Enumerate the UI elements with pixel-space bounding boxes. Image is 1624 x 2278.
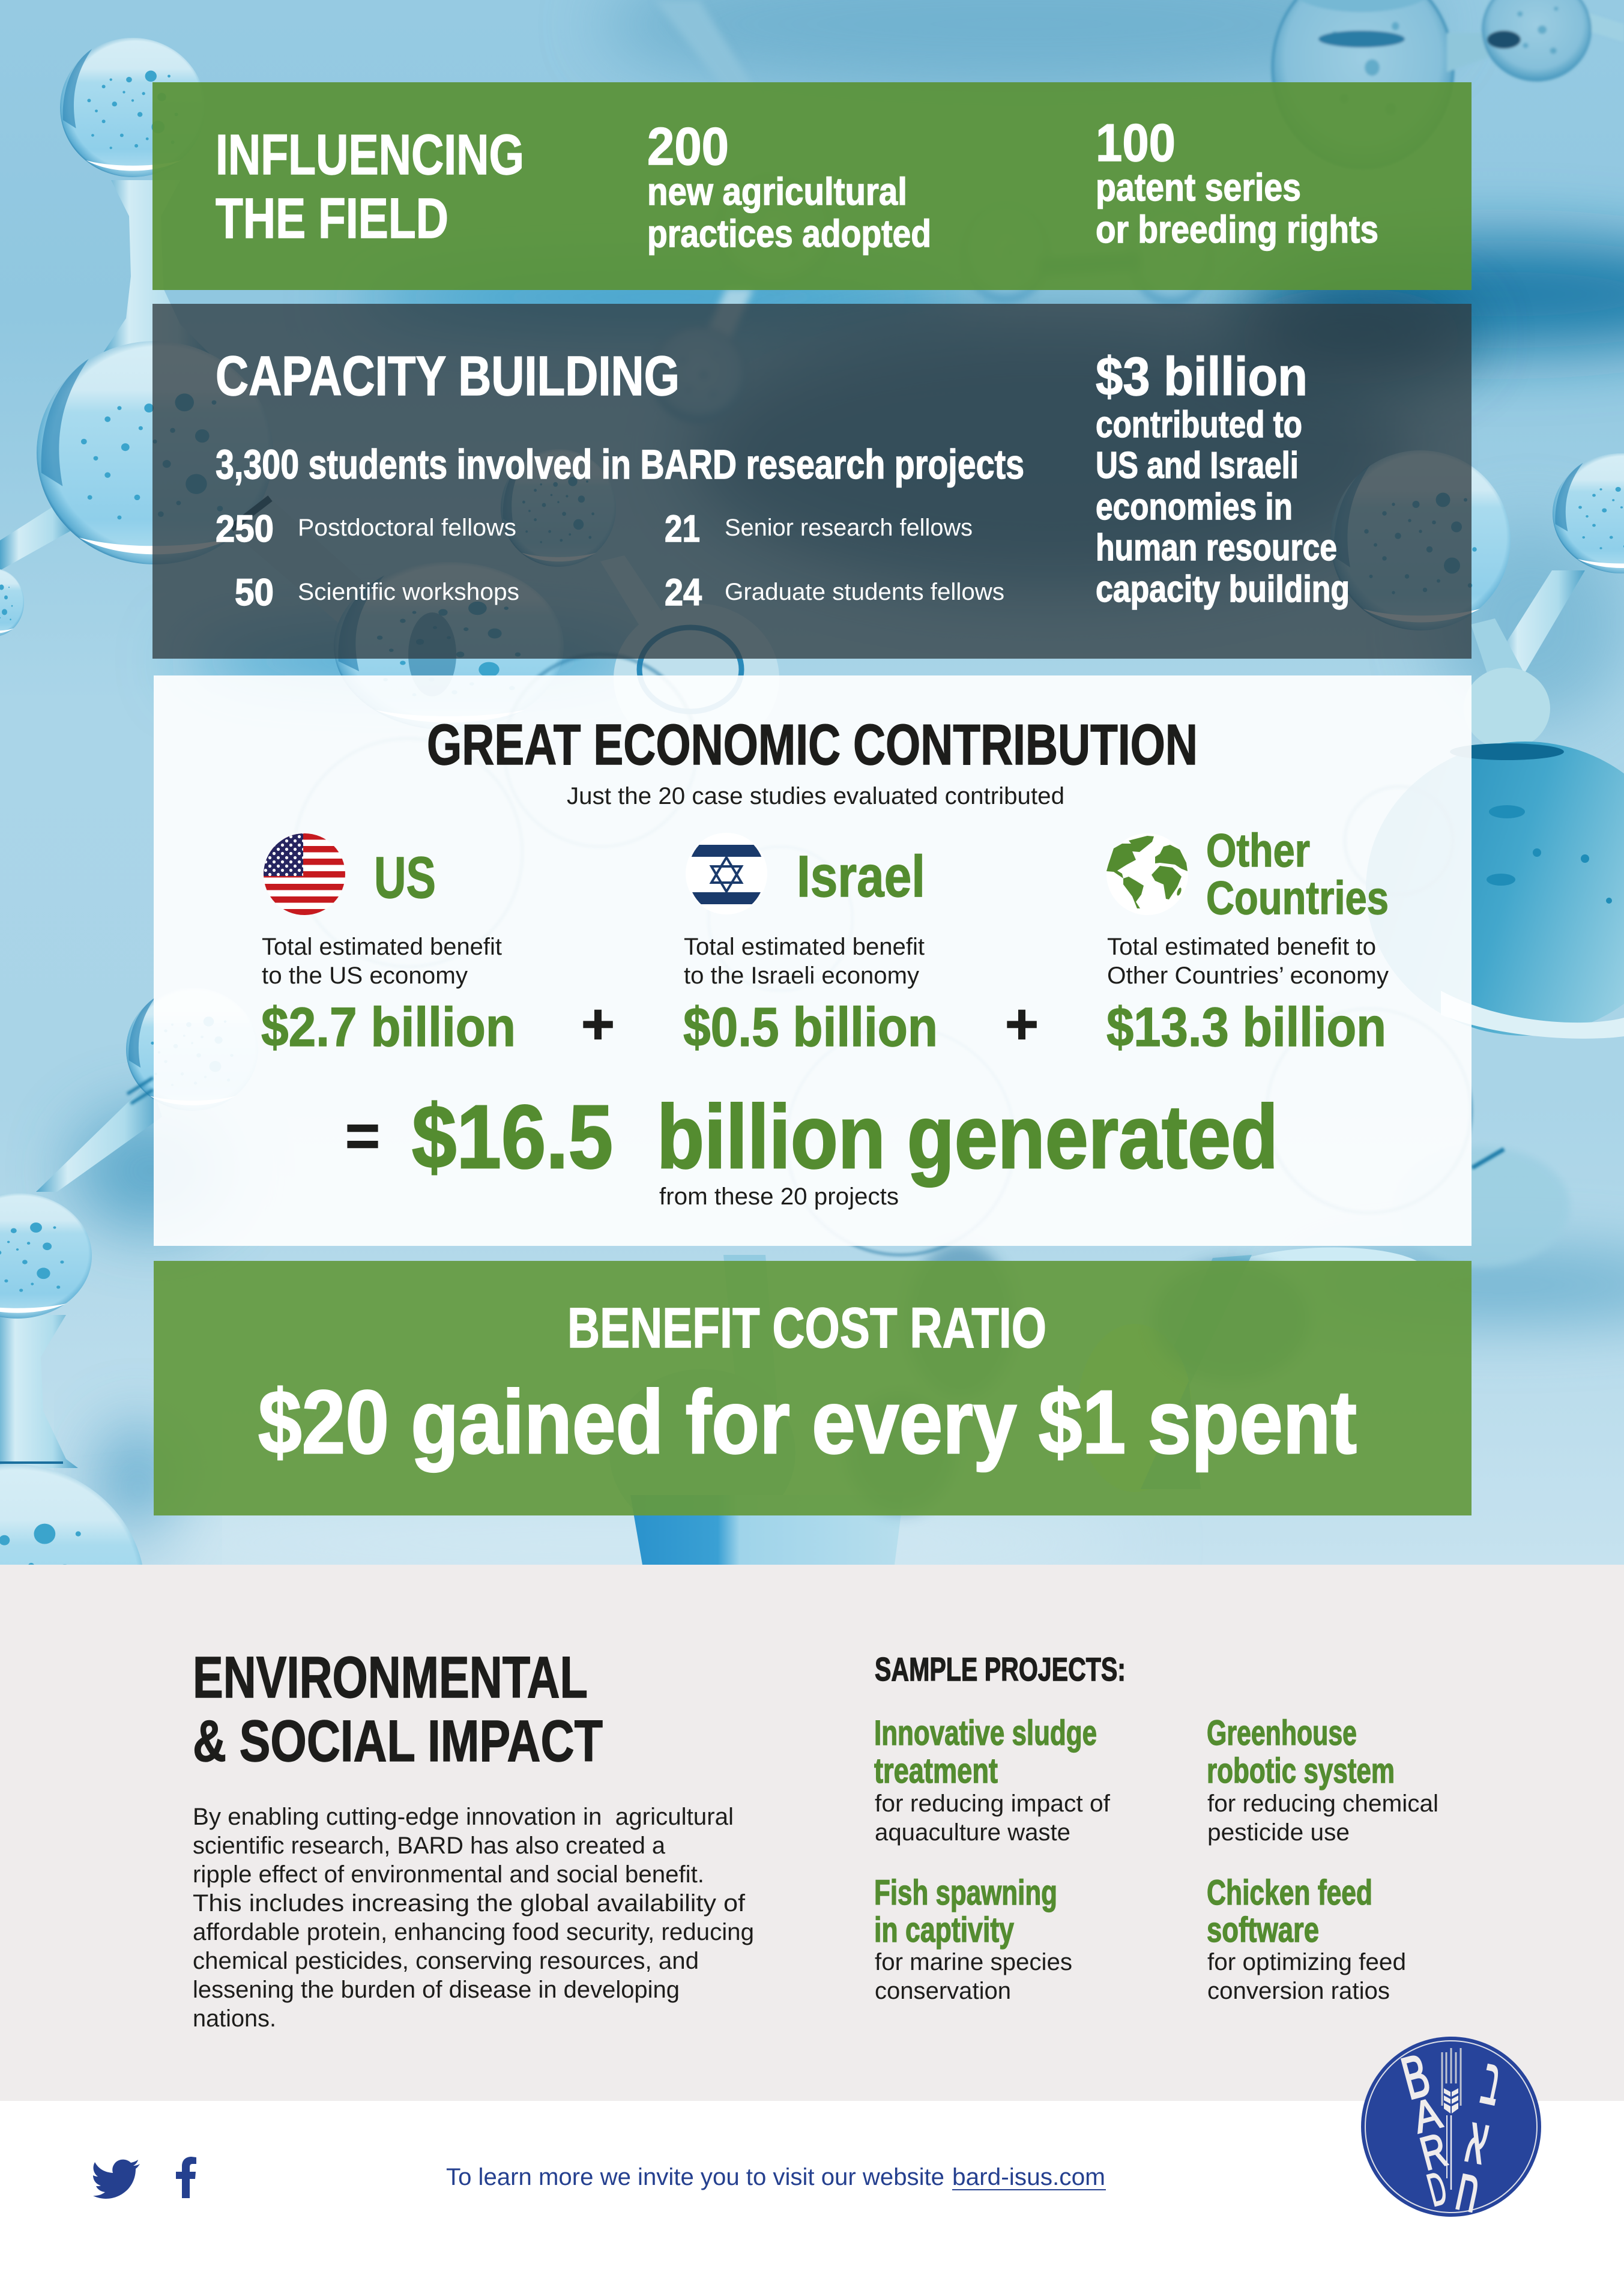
total: $16.5 billion generated: $16.5 [412,1086,613,1187]
text: website call to action: bard-isus.com [952,2164,1105,2190]
panel: capacity building [152,304,1472,659]
text: US benefit: $2.7 billion [261,997,516,1058]
icon: facebook f [176,2157,196,2198]
ghost spheres behind white panel [294,654,1471,1255]
heading: influencing the field: THE FIELD [216,187,448,250]
heading: influencing the field: INFLUENCING [216,123,524,187]
project: chicken feed software: for optimizing feed [1207,1949,1406,1975]
text block: impact description: scientific research, BARD has also created a [193,1832,666,1859]
stat: $3 billion contributed: economies in [1096,486,1293,528]
project: chicken feed software: Chicken feed [1207,1873,1372,1912]
project: chicken feed software [1207,1873,1406,2004]
project: greenhouse robotic system: robotic system [1207,1751,1395,1790]
text: other countries benefit: Other Countries’ economy [1107,962,1389,989]
heading: other countries: Other [1206,824,1310,877]
project: innovative sludge treatment: for reducing impact of [875,1790,1111,1817]
stat: senior research fellows: 21 [665,508,700,550]
text: Israel benefit: Total estimated benefit [684,934,925,960]
text block: impact description: affordable protein, enhancing food security, reducing [193,1919,754,1945]
symbol: plus: + [1005,992,1039,1056]
project: greenhouse robotic system [1207,1714,1438,1846]
symbol: plus: + [581,992,615,1056]
stat: scientific workshops [235,572,519,614]
panel: influencing the field [152,82,1472,290]
left molecule upper [0,38,384,636]
logo letters: BARD: B [1395,2041,1436,2112]
top right molecules [1270,0,1623,83]
stat: 100 patent series: 100 [1096,113,1176,172]
project: innovative sludge treatment: Innovative sludge [874,1714,1097,1753]
icon: globe [1106,833,1188,915]
project: greenhouse robotic system: pesticide use [1207,1819,1350,1846]
heading: other countries: Countries [1206,871,1389,924]
stat: 100 patent series: or breeding rights [1096,208,1378,251]
logo letters: BARD [1395,2041,1452,2216]
text block: impact description [193,1804,754,2032]
project: fish spawning in captivity [874,1873,1072,2004]
text: Israel benefit [683,934,938,1058]
left molecule lower [0,988,258,1718]
right molecules [1237,450,1624,1267]
stat: graduate students fellows [665,572,1004,614]
statement: $20 gained for every $1 spent: $20 gained for every $1 spent [258,1371,1357,1472]
logo letters: BARD: A [1408,2088,1446,2142]
project: fish spawning in captivity: in captivity [874,1911,1014,1950]
stat: 200 new agricultural practices [647,116,931,255]
text: other countries benefit [1106,934,1389,1058]
heading: great economic contribution: GREAT ECONOMIC CONTRIBUTION [427,713,1198,777]
heading: other countries [1206,824,1389,924]
subheading: students involved: 3,300 students involved in BARD research projects [216,441,1024,488]
stat: $3 billion contributed: $3 billion [1096,347,1308,407]
background: blue molecule photograph [0,0,1624,1718]
logo wheat ear [1442,2048,1461,2190]
logo letters: Hebrew: ב [1475,2039,1509,2122]
heading: capacity building: CAPACITY BUILDING [216,345,680,407]
stat: scientific workshops: 50 [235,572,274,614]
text block: impact description: nations. [193,2005,276,2032]
project: chicken feed software: conversion ratios [1207,1978,1390,2004]
panel: footer [0,2101,1624,2278]
stat: 200 new agricultural practices: 200 [647,116,729,176]
stat: 100 patent series [1096,113,1378,251]
project: greenhouse robotic system: for reducing chemical [1207,1790,1438,1817]
project: greenhouse robotic system: Greenhouse [1207,1714,1357,1753]
stat: 200 new agricultural practices: practices adopted [647,212,931,255]
heading: environmental and social impact: ENVIRONMENTAL [193,1645,588,1710]
icon: twitter bird [93,2160,140,2199]
stat: graduate students fellows: Graduate students fellows [725,579,1004,605]
logo: BARD seal [1361,2037,1541,2228]
total: $16.5 billion generated [345,1086,1278,1210]
text: website call to action: To learn more we invite you to visit our website [446,2164,944,2190]
text: Israel benefit: to the Israeli economy [684,962,919,989]
panel: benefit cost ratio [154,1261,1472,1515]
logo letters: Hebrew [1450,2039,1509,2228]
logo letters: BARD: R [1415,2123,1452,2181]
text: other countries benefit: $13.3 billion [1106,997,1386,1058]
project: innovative sludge treatment: treatment [874,1751,998,1790]
stat: postdoctoral fellows: 250 [216,508,274,550]
logo letters: Hebrew: א [1458,2097,1497,2181]
icon: US flag [264,833,345,915]
centre molecules behind dark panel [335,450,779,722]
stat: scientific workshops: Scientific workshops [298,579,519,605]
stat: $3 billion contributed: capacity building [1096,569,1350,610]
stat: senior research fellows [665,508,973,550]
stat: $3 billion contributed: US and Israeli [1096,445,1299,486]
heading: environmental and social impact: & SOCIAL IMPACT [193,1708,603,1774]
stat: postdoctoral fellows: Postdoctoral fellows [298,515,516,541]
stat: postdoctoral fellows [216,508,516,550]
subheading: case studies: Just the 20 case studies evaluated contributed [567,783,1064,809]
text block: impact description: ripple effect of environmental and social benefit. [193,1861,704,1888]
project: chicken feed software: software [1207,1911,1319,1950]
logo letters: Hebrew: ח [1450,2151,1487,2228]
text block: impact description: chemical pesticides, conserving resources, and [193,1948,699,1974]
heading: US: US [374,845,436,910]
project: innovative sludge treatment: aquaculture waste [875,1819,1070,1846]
project: fish spawning in captivity: for marine species [875,1949,1072,1975]
stat: $3 billion contributed: human resource [1096,527,1337,569]
project: fish spawning in captivity: conservation [875,1978,1011,2004]
heading: benefit cost ratio: BENEFIT COST RATIO [567,1296,1046,1360]
project: innovative sludge treatment [874,1714,1111,1846]
text: Israel benefit: $0.5 billion [683,997,938,1058]
panel: great economic contribution [154,675,1472,1246]
lower centre molecule [609,1243,1309,1565]
logo letters: BARD: D [1422,2162,1452,2216]
top centre soft molecule [651,0,1212,422]
text block: impact description: lessening the burden of disease in developing [193,1977,680,2003]
heading: sample projects: SAMPLE PROJECTS: [875,1651,1126,1688]
text: US benefit: Total estimated benefit [262,934,502,960]
text: US benefit: to the US economy [262,962,468,989]
stat: graduate students fellows: 24 [665,572,702,614]
heading: Israel: Israel [797,844,925,909]
stat: $3 billion contributed: contributed to [1096,404,1302,446]
stat: $3 billion contributed [1096,347,1350,610]
total: $16.5 billion generated: = [345,1102,380,1170]
heading: influencing the field [216,123,524,250]
text: US benefit [261,934,516,1058]
text block: impact description: This includes increasing the global availability of [193,1890,746,1917]
total: $16.5 billion generated: from these 20 projects [659,1183,899,1210]
heading: environmental and social impact [193,1645,603,1774]
project: fish spawning in captivity: Fish spawning [874,1873,1057,1912]
total: $16.5 billion generated: billion generated [657,1086,1278,1187]
icon: Israel flag [684,833,768,914]
panel: environmental and social impact [0,1565,1624,2101]
text: other countries benefit: Total estimated benefit to [1107,934,1376,960]
stat: senior research fellows: Senior research fellows [725,515,973,541]
stat: 100 patent series: patent series [1096,166,1301,209]
text block: impact description: By enabling cutting-edge innovation in agricultural [193,1804,734,1830]
stat: 200 new agricultural practices: new agricultural [647,170,907,213]
